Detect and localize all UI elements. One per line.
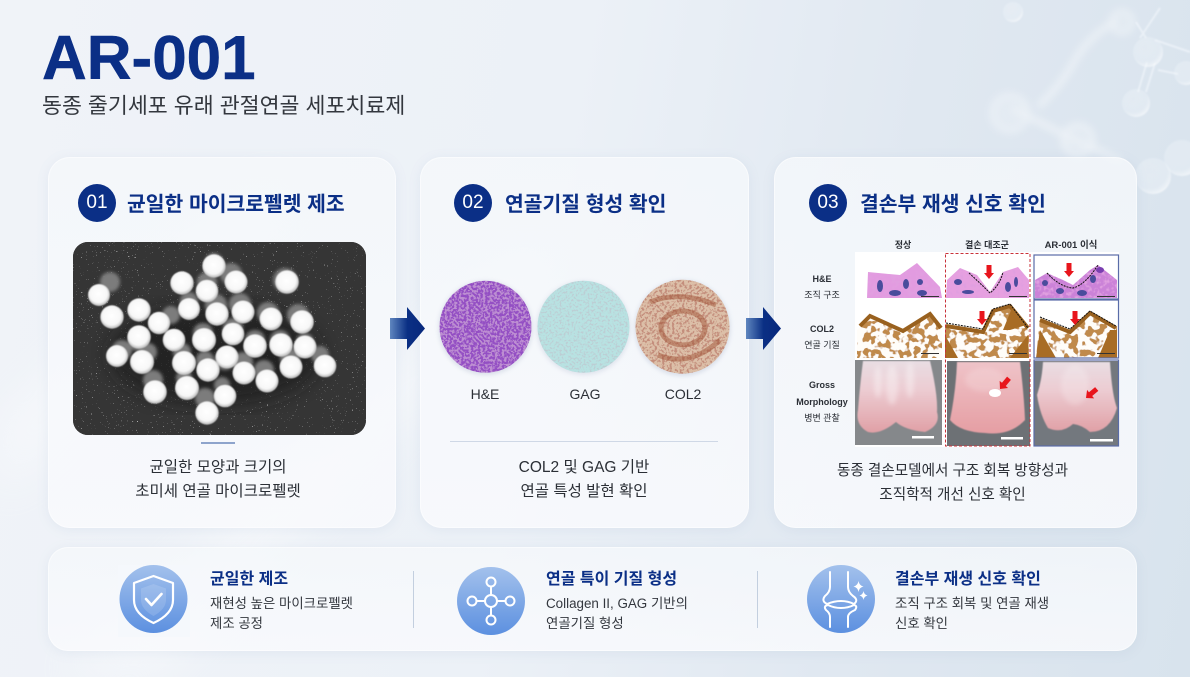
row label COL2 xyxy=(804,324,840,350)
step number 03: 03 xyxy=(817,192,839,213)
COL2 row xyxy=(857,304,1117,358)
caption 03: 조직학적 개선 신호 확인 xyxy=(879,487,1026,503)
arrow: step 1 to 2 xyxy=(390,307,425,350)
short accent line xyxy=(201,442,235,444)
caption 01: 균일한 모양과 크기의 xyxy=(150,459,286,476)
step number 01: 01 xyxy=(86,192,108,213)
row label H&E xyxy=(804,274,840,300)
H&E row xyxy=(867,263,1117,298)
histology comparison grid xyxy=(855,252,1120,447)
icon: shield check xyxy=(120,565,188,633)
red arrows xyxy=(977,263,1100,402)
label GAG: GAG xyxy=(569,386,601,402)
divider line xyxy=(450,441,718,442)
step number 02: 02 xyxy=(462,192,484,213)
blue frames: AR-001 xyxy=(1034,255,1118,446)
summary 1 text: 제조 공정 xyxy=(210,616,263,630)
column header: AR-001: AR-001 이식 xyxy=(1045,240,1097,251)
summary 2 text: Collagen II, GAG 기반의 xyxy=(546,596,688,611)
caption 01 xyxy=(135,459,301,500)
panel: 02 cartilage matrix xyxy=(420,157,749,528)
summary 2 title: 연골 특이 기질 형성 xyxy=(546,571,677,588)
micrograph of microbeads xyxy=(73,242,366,435)
caption 02: COL2 및 GAG 기반 xyxy=(519,459,649,476)
step number 03 xyxy=(809,184,847,222)
summary 3 text xyxy=(895,596,1049,630)
heading 01: 균일한 마이크로펠렛 제조 xyxy=(127,194,345,216)
divider xyxy=(413,571,414,628)
panel: 03 regeneration signal xyxy=(774,157,1137,528)
step number 02 xyxy=(454,184,492,222)
heading 02: 연골기질 형성 확인 xyxy=(505,194,666,216)
summary 1 text xyxy=(210,596,353,630)
summary 1 title: 균일한 제조 xyxy=(210,571,288,588)
H&E circle xyxy=(440,281,532,373)
stained tissue circles xyxy=(438,279,732,377)
icon: knee joint xyxy=(807,565,875,633)
divider xyxy=(757,571,758,628)
summary 2 text: 연골기질 형성 xyxy=(546,616,624,630)
caption 02 xyxy=(519,459,649,500)
summary 3 title: 결손부 재생 신호 확인 xyxy=(895,571,1041,588)
row label H&E: 조직 구조 xyxy=(804,290,840,300)
panel: summary strip xyxy=(48,547,1137,651)
caption 01: 초미세 연골 마이크로펠렛 xyxy=(135,483,301,500)
red dashed frame: defect control xyxy=(946,254,1030,446)
row label gross morphology: 병변 관찰 xyxy=(804,413,840,423)
column header: defect control: 결손 대조군 xyxy=(965,240,1009,250)
row label gross morphology: Morphology xyxy=(796,396,848,406)
caption 03 xyxy=(837,462,1068,503)
column header: normal: 정상 xyxy=(895,240,911,250)
row label COL2: 연골 기질 xyxy=(804,340,840,350)
GAG circle xyxy=(538,281,630,373)
COL2 circle xyxy=(636,280,730,374)
row label gross morphology: Gross xyxy=(809,380,835,390)
title: AR-001 xyxy=(42,24,256,93)
label H&E: H&E xyxy=(471,386,499,402)
subtitle: 동종 줄기세포 유래 관절연골 세포치료제 xyxy=(42,93,405,118)
step number 01 xyxy=(78,184,116,222)
arrow: step 2 to 3 xyxy=(746,307,781,350)
summary 3 text: 신호 확인 xyxy=(895,616,948,630)
row label gross morphology xyxy=(796,380,848,423)
row label COL2: COL2 xyxy=(810,324,834,334)
summary 3 text: 조직 구조 회복 및 연골 재생 xyxy=(895,596,1049,611)
summary 1 text: 재현성 높은 마이크로펠렛 xyxy=(210,596,353,611)
icon: network nodes xyxy=(457,567,525,635)
label COL2: COL2 xyxy=(665,386,701,402)
caption 02: 연골 특성 발현 확인 xyxy=(520,483,648,500)
panel: 01 microbead manufacturing xyxy=(48,157,396,528)
gross morphology row xyxy=(855,360,1118,446)
caption 03: 동종 결손모델에서 구조 회복 방향성과 xyxy=(837,463,1068,479)
heading 03: 결손부 재생 신호 확인 xyxy=(860,194,1046,216)
row label H&E: H&E xyxy=(812,274,832,284)
summary 2 text xyxy=(546,596,688,630)
